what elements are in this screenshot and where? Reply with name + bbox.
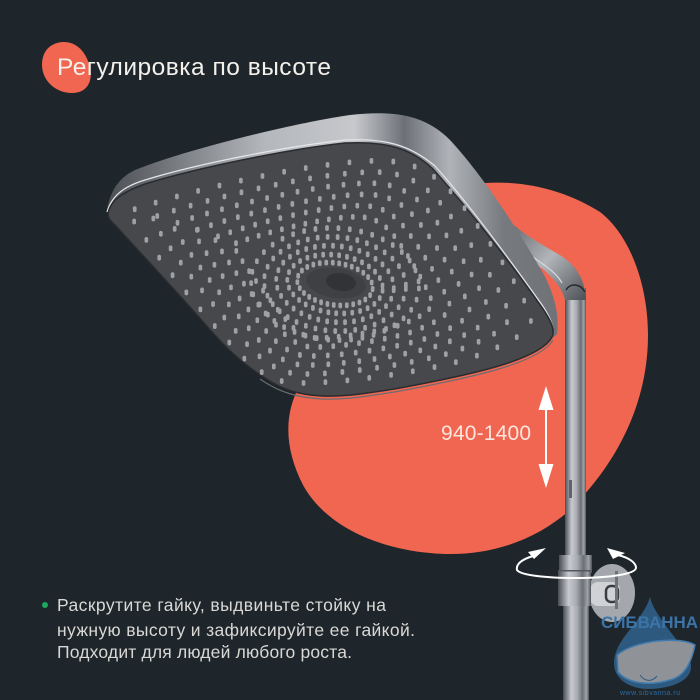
double arrow [538, 386, 554, 488]
bathtub face [640, 675, 657, 680]
height value: 940-1400 [441, 422, 531, 445]
head neck wedge [500, 225, 558, 340]
shower face [108, 143, 553, 396]
bathtub [617, 640, 695, 683]
arm bend highlight [533, 257, 562, 283]
description text [57, 595, 415, 662]
description text: Раскрутите гайку, выдвиньте стойку на [57, 595, 386, 615]
pipe joint detail [569, 480, 572, 498]
description text: Подходит для людей любого роста. [57, 642, 352, 662]
face lower edge [260, 340, 553, 399]
watermark url: www.sibvanna.ru [619, 690, 680, 697]
description text: нужную высоту и зафиксируйте ее гайкой. [57, 620, 415, 640]
watermark name: СИБВАННА [601, 613, 698, 632]
rotation ring [517, 555, 636, 578]
wall bracket [589, 564, 635, 622]
shower head [107, 113, 558, 399]
title text: Регулировка по высоте [57, 54, 331, 81]
vertical pipe upper [565, 288, 586, 558]
rim edge highlight [107, 140, 553, 334]
watermark [601, 597, 698, 697]
height dimension [441, 386, 554, 488]
shower system [500, 220, 636, 700]
red blob behind shower [288, 183, 648, 554]
shower arm [508, 220, 586, 300]
title [42, 42, 331, 93]
rotation arrowhead right [607, 548, 625, 559]
rotation arrowhead left [528, 548, 546, 559]
green bullet [42, 602, 48, 608]
water drop [614, 597, 691, 689]
central disc [304, 264, 368, 302]
chrome rim [107, 113, 558, 345]
nozzle rings [130, 160, 531, 384]
description [42, 595, 415, 662]
pipe collar shadow [566, 285, 585, 292]
clamp [558, 555, 592, 606]
title blob [42, 42, 91, 93]
lower pipe [563, 600, 589, 700]
